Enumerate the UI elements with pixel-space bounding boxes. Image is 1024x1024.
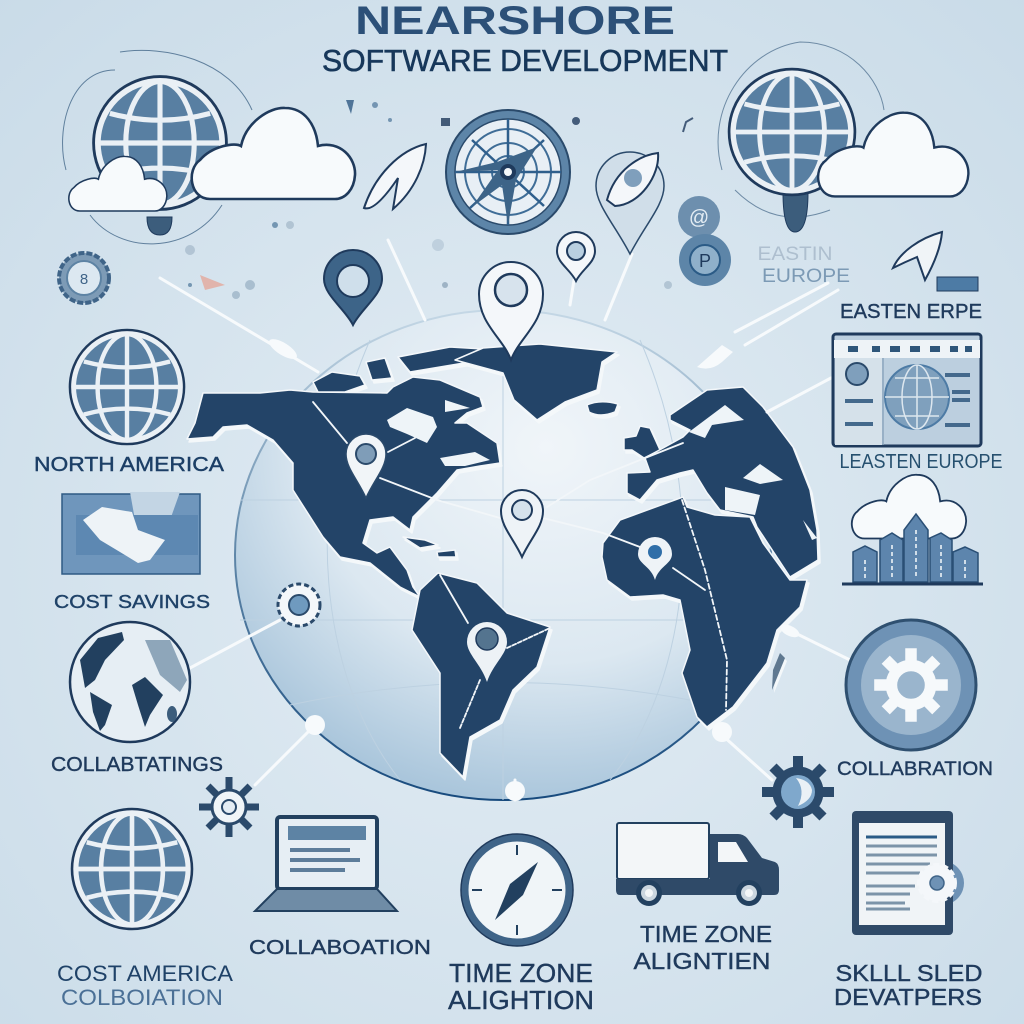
label: North America: NORTH AMERICA — [34, 454, 225, 476]
icon: badge far left: 8 — [80, 271, 88, 288]
label: Time Zone Alignment center — [448, 958, 594, 1015]
faded label: Eastin Europe — [758, 244, 850, 287]
icon: white gear on globe edge — [278, 584, 320, 626]
icon: location marker top right — [596, 152, 664, 254]
icon: clock compass — [461, 834, 573, 946]
continent: British Isles — [624, 426, 660, 458]
label: Time Zone Alignment center: TIME ZONE — [449, 958, 593, 988]
icon: badge far left — [59, 253, 109, 303]
label: Time Zone Alignment right: ALIGNTIEN — [634, 948, 770, 974]
label: Time Zone Alignment center: ALIGHTION — [448, 985, 594, 1015]
map pin: small top — [557, 232, 595, 281]
icon: gear dial — [846, 620, 976, 750]
icon: globe and clouds top left — [63, 50, 355, 244]
icon: compass top center — [446, 110, 570, 234]
connector lines — [160, 240, 850, 800]
label: Collabratings: COLLABTATINGS — [51, 754, 223, 776]
map pin: South America — [467, 622, 507, 682]
icon: small badges — [678, 196, 731, 286]
continent: South America — [412, 573, 550, 777]
label: Skilled Developers — [834, 960, 982, 1010]
icon: dark gear — [762, 756, 834, 828]
icon: globe left — [70, 330, 184, 444]
label: Skilled Developers: DEVATPERS — [834, 984, 982, 1010]
label: Skilled Developers: SKLLL SLED — [836, 960, 982, 986]
continent: Madagascar — [772, 653, 785, 690]
icon: cloud over buildings — [842, 475, 983, 584]
icon: globe and clouds top right — [718, 42, 968, 232]
label: Leasten Europe: LEASTEN EUROPE — [840, 451, 1002, 473]
continent: Arctic islands — [313, 347, 500, 392]
label: Cost America Collaboration: COLBOIATION — [61, 985, 223, 1010]
map pin: Atlantic — [501, 490, 543, 557]
icon: delivery truck — [616, 823, 779, 906]
continent: Caribbean islands — [403, 537, 456, 557]
map pin: Africa — [638, 537, 672, 580]
icon: small badges: @ — [689, 207, 709, 229]
label: Cost America Collaboration — [57, 961, 233, 1010]
label: Cost America Collaboration: COST AMERICA — [57, 961, 233, 986]
map pin: North America — [346, 434, 386, 498]
faded label: Eastin Europe: EUROPE — [762, 266, 850, 287]
icon: globe bottom left — [72, 809, 192, 929]
continent: Africa — [602, 497, 807, 727]
icon: small badges: P — [699, 251, 711, 271]
title: SOFTWARE DEVELOPMENT — [322, 43, 728, 78]
label: Collaboration right: COLLABRATION — [837, 759, 993, 780]
label: Easten Erpe: EASTEN ERPE — [840, 301, 982, 323]
icon: paper plane left — [364, 144, 426, 209]
world map continents — [187, 344, 818, 777]
central globe — [235, 310, 771, 800]
icon: paper plane right — [893, 232, 978, 291]
icon: earth globe left — [70, 622, 190, 742]
map pin: large white top — [479, 262, 543, 360]
icon: laptop — [255, 817, 397, 911]
label: Cost Savings: COST SAVINGS — [54, 592, 210, 612]
route lines — [313, 402, 727, 728]
label: Time Zone Alignment right: TIME ZONE — [640, 921, 772, 947]
continent: North America — [187, 377, 500, 597]
continent: Greenland — [455, 344, 617, 420]
icon: outlined gear — [199, 777, 259, 837]
continent: Iceland — [587, 402, 618, 415]
label: Time Zone Alignment right — [634, 921, 772, 974]
continent: Eurasia — [627, 387, 818, 577]
title: NEARSHORE — [355, 0, 675, 43]
decorative specks — [185, 100, 693, 299]
icon: document with gear — [852, 811, 964, 935]
faded label: Eastin Europe: EASTIN — [758, 244, 832, 265]
label: Collaboration bottom: COLLABOATION — [249, 937, 431, 959]
map pin: dark top — [324, 250, 382, 325]
seas and lakes on the map — [387, 400, 817, 540]
title — [322, 0, 728, 78]
connector nodes — [266, 335, 801, 801]
icon: banknotes — [62, 492, 200, 574]
icon: browser window — [833, 334, 981, 446]
